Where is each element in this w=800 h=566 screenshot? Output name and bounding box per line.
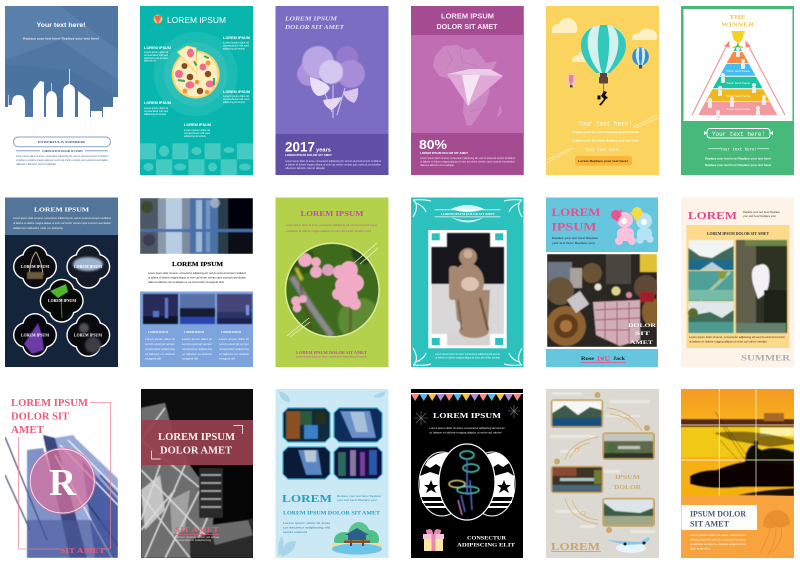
tagline: your text here! Replace your	[552, 242, 595, 245]
ornament corners	[413, 200, 522, 365]
intro text: ut labore et dolore magna aliqua ut enim ad minim veniam quis nostrud exercitation	[13, 222, 112, 225]
blue balloon	[632, 48, 649, 68]
center egg	[439, 444, 495, 520]
photo caption: AMET	[630, 340, 653, 346]
header band	[546, 198, 658, 252]
quatrefoil 3	[40, 279, 84, 323]
column text: sed do eiusmod tempor	[182, 343, 212, 346]
poster: summer collage	[681, 198, 794, 367]
caption text: ut labore et dolore magna aliqua ut enim ad minim veniam	[435, 356, 500, 360]
column text: consectetur adipiscing	[219, 348, 250, 351]
subheading: Your text here!	[720, 148, 757, 152]
column text: sed do eiusmod tempor	[145, 343, 175, 346]
callouts: LOREM IPSUM	[144, 101, 171, 105]
body text: Lorem ipsum dolor sit amet	[283, 522, 330, 525]
body lines	[705, 156, 771, 167]
caption text	[435, 353, 501, 360]
pizza glow rings	[154, 32, 238, 116]
white panel	[684, 9, 792, 121]
tagline: Replace your text here! Replace	[743, 211, 781, 214]
title box	[682, 505, 757, 530]
tagline: your text here! Replace your	[743, 215, 776, 218]
caption text: Lorem ipsum dolor sit amet	[175, 536, 219, 539]
label frame: Your text here!	[712, 131, 765, 138]
column text: Lorem ipsum dolor sit	[182, 338, 212, 341]
pink emblem	[29, 448, 96, 514]
poster: sunset fisherman	[681, 389, 794, 558]
callouts: consectetur elit sed	[223, 98, 250, 101]
names: Rose	[581, 357, 594, 362]
subheading: LOREM IPSUM DOLOR SIT AMET	[283, 512, 381, 516]
captions	[148, 330, 241, 334]
body text: ullamco laboris nisi ut aliquip	[285, 167, 326, 170]
title: AMET	[11, 425, 44, 436]
intro text: Lorem ipsum dolor sit amet, consectetur adipiscing elit sed do	[430, 427, 505, 430]
heading: Your text here!	[578, 120, 632, 128]
label frame	[704, 128, 773, 138]
building photo	[5, 435, 118, 558]
button: Lorem Replace your text here!	[578, 159, 628, 163]
column text: ut labore et dolore	[145, 353, 176, 356]
octagon photo 2	[334, 408, 382, 442]
subheading: Your text here!	[586, 148, 620, 153]
title box: SIT AMET	[690, 520, 729, 528]
panel heading: LOREM IPSUM DOLOR SIT AMET	[707, 232, 770, 236]
body text	[285, 160, 382, 170]
callouts: Lorem ipsum dolor sit	[223, 95, 249, 98]
body text: ut labore et dolore magna aliqua ut enim ad minim veniam quis nostrud exercitation	[16, 159, 109, 162]
column text: ut labore et dolore	[182, 353, 213, 356]
callouts: consectetur elit sed	[184, 132, 211, 135]
caption: SIT AMET	[175, 525, 219, 534]
route arcs	[565, 408, 642, 524]
callouts: Lorem ipsum dolor sit	[223, 42, 249, 44]
intro text: Lorem ipsum dolor sit amet, consectetur adipiscing elit, sed do eiusmod tempor	[286, 224, 378, 227]
body text	[16, 155, 109, 166]
title	[158, 432, 236, 456]
body text: ullamco laboris nisi ut aliquip	[420, 164, 455, 167]
callouts: LOREM IPSUM	[144, 46, 171, 50]
column text: sed do eiusmod tempor	[219, 343, 249, 346]
title: DOLOR SIT	[11, 412, 69, 422]
photo trio	[143, 294, 252, 324]
percent: 80%	[419, 138, 447, 152]
bears	[611, 207, 654, 245]
title: DOLOR SIT AMET	[284, 24, 344, 31]
subtitle: Replace your text here! Replace your text here!	[23, 36, 99, 40]
sunset photo	[681, 389, 794, 496]
blue panel	[140, 292, 253, 367]
quatrefoil 5: LOREM IPSUM	[74, 334, 103, 338]
quatrefoil 2	[66, 245, 110, 289]
tagline	[743, 211, 781, 218]
header photo	[140, 198, 253, 254]
names: I♥U	[597, 355, 610, 363]
body lines: Replace your text here! Replace your text here!	[572, 138, 639, 142]
body text: Lorem ipsum dolor sit amet, consectetur	[690, 534, 746, 537]
poster: architecture collage	[140, 198, 253, 367]
title: Your text here!	[36, 22, 86, 29]
intro text: ut labore et dolore magna aliqua ut enim ad minim veniam quis nostrud exercitation	[148, 276, 247, 280]
subheading: LOREM IPSUM DOLOR SIT AMET	[42, 150, 83, 153]
side heading: IPSUM	[615, 474, 640, 481]
leaf decorations	[278, 391, 386, 557]
heading: LOREM	[282, 493, 333, 505]
intro text	[13, 217, 112, 230]
callouts: Lorem ipsum dolor sit	[184, 129, 210, 132]
callouts: consectetur elit sed	[144, 110, 169, 113]
column text: magna ali	[145, 358, 162, 360]
poster: purple flower	[276, 6, 388, 175]
pink balloon	[566, 74, 576, 88]
title: LOREM IPSUM	[158, 432, 236, 443]
title: LOREM IPSUM	[172, 261, 223, 268]
skyline silhouette	[5, 69, 118, 130]
pyramid: Your text here	[726, 82, 751, 85]
body text: ut labore et dolore magna aliqua enim	[690, 543, 746, 546]
africa map	[433, 45, 502, 126]
route markers	[554, 392, 650, 533]
pyramid: Your text here	[726, 108, 751, 111]
quatrefoil 5	[66, 313, 110, 357]
intro text: ut labore et dolore magna aliqua ut enim ad minim	[430, 432, 502, 434]
right egg	[469, 452, 515, 516]
title: LOREM	[552, 207, 601, 219]
clouds	[552, 18, 657, 62]
body lines: Replace your text here! Replace your text here!	[705, 156, 771, 160]
callouts: adipiscing do tempor	[223, 48, 245, 50]
body text: ut labore et dolore magna aliqua ut enim ad minim veniam quis nostrud exercitation	[420, 160, 516, 164]
callouts: LOREM IPSUM	[223, 90, 250, 94]
callouts: adipiscing do tempor	[144, 57, 168, 60]
tagline: Replace your text here! Replace	[552, 237, 599, 240]
title ornament: LOREM IPSUM DOLOR SIT AMET	[441, 212, 496, 216]
callouts: Lorem ipsum dolor sit	[144, 51, 168, 54]
poster: hot air balloon	[546, 6, 659, 175]
title	[721, 15, 755, 28]
button	[575, 156, 632, 166]
column text: Lorem ipsum dolor sit	[145, 338, 175, 341]
subheading: LOREM IPSUM DOLOR SIT AMET	[420, 151, 468, 155]
body text	[283, 522, 330, 534]
blossom photo	[284, 242, 380, 338]
closing text	[457, 536, 516, 548]
bottom band	[276, 134, 388, 175]
intro text: ullamco laboris nisi ut aliquip ex ea commodo consequat duis	[148, 281, 225, 284]
jellyfish	[760, 510, 790, 555]
flower bouquet	[297, 46, 365, 118]
quatrefoil 2: LOREM IPSUM	[74, 265, 103, 269]
quatrefoil 1	[13, 245, 57, 289]
captions: LOREM IPSUM	[148, 330, 168, 334]
title ornament	[434, 205, 500, 222]
title: DOLOR AMET	[160, 446, 232, 456]
body lines	[572, 130, 639, 142]
lattice photo	[141, 389, 253, 558]
footer band	[411, 133, 523, 175]
poster: teddy bears	[546, 198, 662, 367]
body text: ullamco laboris nisi ut aliquip	[16, 163, 57, 166]
quatrefoil 1: LOREM IPSUM	[21, 265, 50, 269]
intro text	[430, 427, 505, 434]
closing text: CONSECTUR	[467, 536, 506, 542]
intro text: ut labore et dolore magna aliqua ut enim ad minim veniam quis	[286, 230, 372, 233]
airplane	[606, 537, 650, 553]
title: DOLOR SIT AMET	[436, 24, 498, 31]
title: IPSUM	[552, 222, 597, 234]
footer label: SIT AMET	[60, 546, 105, 555]
callouts	[144, 36, 250, 138]
gift box	[423, 529, 444, 551]
captions: LOREM IPSUM	[221, 330, 241, 334]
photo 4	[602, 498, 655, 527]
side text: your text here! Replace your	[337, 499, 377, 502]
column text: Lorem ipsum dolor sit	[219, 338, 249, 341]
caption text: Lorem ipsum dolor sit amet, consectetur adipiscing elit sed do eiusmod tempor	[689, 336, 785, 339]
fireworks	[414, 405, 520, 425]
caption text: consectetur adipiscing	[175, 539, 212, 542]
corner keys	[432, 233, 503, 345]
column text	[145, 338, 250, 360]
names: Jack	[613, 357, 625, 362]
title: LOREM IPSUM	[433, 412, 502, 420]
octagon photo 1	[283, 408, 330, 442]
statue photo	[432, 233, 504, 346]
photo frame	[428, 230, 507, 348]
photo 2	[602, 432, 655, 460]
body text	[420, 157, 516, 167]
column text: magna ali	[182, 358, 199, 360]
pink emblem: R	[49, 462, 77, 504]
callouts: adipiscing do tempor	[184, 135, 206, 138]
column text: ut labore et dolore	[219, 353, 250, 356]
title	[11, 398, 89, 436]
callouts: adipiscing do tempor	[144, 113, 166, 116]
pyramid	[698, 43, 777, 120]
photos	[688, 240, 787, 333]
title: LOREM IPSUM	[441, 14, 494, 20]
title: LOREM	[688, 210, 738, 222]
octagon photo 4	[334, 447, 382, 479]
body text: ut labore et dolore magna aliqua ut enim ad minim veniam quis nostrud exercitation	[285, 164, 382, 166]
poster: buddha statue	[411, 198, 524, 367]
body text: Lorem ipsum dolor sit amet, consectetur adipiscing elit, sed do eiusmod tempor incididunt	[285, 160, 381, 163]
title: LOREM IPSUM	[11, 398, 89, 409]
body text: ad minim	[690, 548, 710, 550]
photo caption	[628, 323, 657, 346]
intro text: Lorem ipsum dolor sit amet, consectetur adipiscing elit, sed do eiusmod tempor incididunt	[13, 217, 111, 220]
pavilion illustration	[332, 522, 382, 554]
corner marks	[152, 426, 242, 459]
title box: IPSUM DOLOR	[690, 510, 747, 518]
poster: cherry blossom	[276, 198, 388, 367]
year: 2017	[285, 138, 315, 154]
intro text	[148, 272, 247, 284]
poster: winner pyramid	[681, 6, 794, 175]
pill heading: POWERFUL & SUPERIOR	[38, 140, 86, 144]
quatrefoil 4: LOREM IPSUM	[21, 334, 50, 338]
yellow panel	[686, 225, 790, 348]
side text: Replace your text here! Replace	[337, 495, 382, 498]
callouts: consectetur elit sed	[223, 44, 250, 48]
pink rule	[581, 361, 626, 364]
body lines: Replace your text here! Replace your text here!	[572, 130, 639, 134]
title	[552, 207, 601, 234]
poster: black and white lattice	[141, 389, 253, 558]
photo 3	[551, 466, 603, 493]
poster: africa diamond	[411, 6, 524, 175]
quatrefoil 4	[13, 313, 57, 357]
body text: Lorem ipsum dolor sit amet, consectetur adipiscing elit, sed do eiusmod tempor incididunt	[16, 155, 108, 158]
summer label: SUMMER	[741, 352, 791, 362]
intro text	[286, 224, 378, 233]
callouts: adipiscing do tempor	[223, 101, 245, 104]
caption text: ut labore et dolore magna aliqua ut enim ad minim veniam	[689, 340, 767, 344]
title	[284, 16, 344, 31]
red band	[141, 420, 253, 465]
poster: blue caves	[276, 389, 388, 558]
photo caption: SIT	[635, 331, 651, 337]
quatrefoil 3: LOREM IPSUM	[48, 299, 77, 303]
captions: LOREM IPSUM	[184, 330, 204, 334]
body lines: Replace your text here! Replace your text here!	[705, 163, 771, 167]
diagonal lines	[547, 115, 658, 163]
pyramid: Your text here	[726, 95, 751, 98]
speckled texture	[550, 392, 655, 533]
photo 1	[551, 399, 603, 428]
photo caption: DOLOR	[628, 323, 657, 329]
poster: skyscraper R	[5, 389, 118, 558]
caption: LOREM IPSUM DOLOR SIT AMET	[296, 350, 367, 355]
tagline	[552, 237, 599, 245]
caption rule	[175, 533, 219, 536]
title: LOREM IPSUM	[34, 206, 89, 214]
octagon photo 3	[283, 447, 330, 479]
callouts: LOREM IPSUM	[223, 36, 250, 40]
column text: consectetur adipiscing	[145, 348, 176, 351]
main balloon	[581, 25, 626, 84]
body text: Lorem ipsum dolor sit amet, consectetur adipiscing elit, sed do eiusmod tempor incididunt	[420, 157, 515, 160]
left egg	[419, 452, 465, 516]
caption rule text: Lorem ipsum dolor sit amet, consectetur adipiscing elit sed do	[296, 356, 368, 358]
rule	[551, 550, 601, 553]
year	[285, 138, 331, 154]
poster: black eggs	[411, 389, 523, 558]
subheading	[16, 150, 108, 153]
title: WINNER	[721, 22, 755, 28]
header band	[411, 6, 523, 35]
side heading	[614, 474, 641, 491]
year: years	[316, 148, 331, 154]
poster: travel route	[546, 389, 659, 558]
title	[436, 14, 498, 31]
footer band	[546, 349, 658, 367]
title: LOREM IPSUM	[300, 209, 364, 218]
names	[581, 355, 625, 363]
callouts: Lorem ipsum dolor sit	[144, 107, 168, 110]
body text: adipiscing elit sed do eiusmod tempor	[690, 538, 746, 542]
subheading	[708, 148, 769, 152]
grid lines	[681, 389, 794, 496]
pill heading	[14, 137, 110, 147]
ingredient grid	[140, 143, 253, 175]
pizza	[172, 46, 220, 98]
title: LOREM IPSUM	[167, 16, 226, 25]
title: THE	[729, 15, 746, 21]
intro text: Lorem ipsum dolor sit amet, consectetur adipiscing elit, sed do eiusmod tempor incididunt	[148, 272, 246, 275]
body text: sed do eiusmod	[283, 531, 308, 534]
subheading: LOREM IPSUM DOLOR SIT AMET	[285, 153, 332, 157]
poster: city skyline	[5, 6, 118, 175]
poster: dark quatrefoils	[5, 198, 118, 367]
caption text	[689, 336, 785, 344]
side text	[337, 495, 382, 502]
side heading: DOLOR	[614, 484, 641, 491]
caption text: Lorem ipsum dolor sit amet, consectetur adipiscing elit sed do	[435, 353, 501, 356]
climbing figure	[598, 84, 608, 106]
pyramid: Your text here	[726, 70, 751, 73]
caption text	[175, 536, 219, 542]
callouts: consectetur elit sed	[144, 54, 169, 57]
bunting	[411, 393, 523, 401]
diamond	[447, 69, 503, 106]
logo icon	[154, 14, 162, 24]
pink frame	[18, 402, 110, 549]
trophy	[731, 31, 745, 48]
body text: consectetur adipiscing elit	[283, 526, 330, 530]
callouts: LOREM IPSUM	[184, 123, 211, 127]
title: LOREM IPSUM	[284, 16, 338, 22]
arrows	[692, 42, 785, 115]
column text: magna ali	[219, 358, 236, 360]
callouts: labore et	[144, 60, 156, 62]
big word: LOREM	[551, 541, 601, 553]
tea party photo	[546, 254, 662, 347]
body text	[690, 534, 746, 550]
column text: consectetur adipiscing	[182, 348, 213, 351]
poster: pizza	[140, 6, 253, 175]
intro text: ullamco laboris nisi ut aliquip	[13, 227, 64, 230]
diagonal lines	[287, 243, 378, 337]
header band	[5, 198, 118, 235]
closing text: ADIPISCING ELIT	[457, 542, 516, 548]
